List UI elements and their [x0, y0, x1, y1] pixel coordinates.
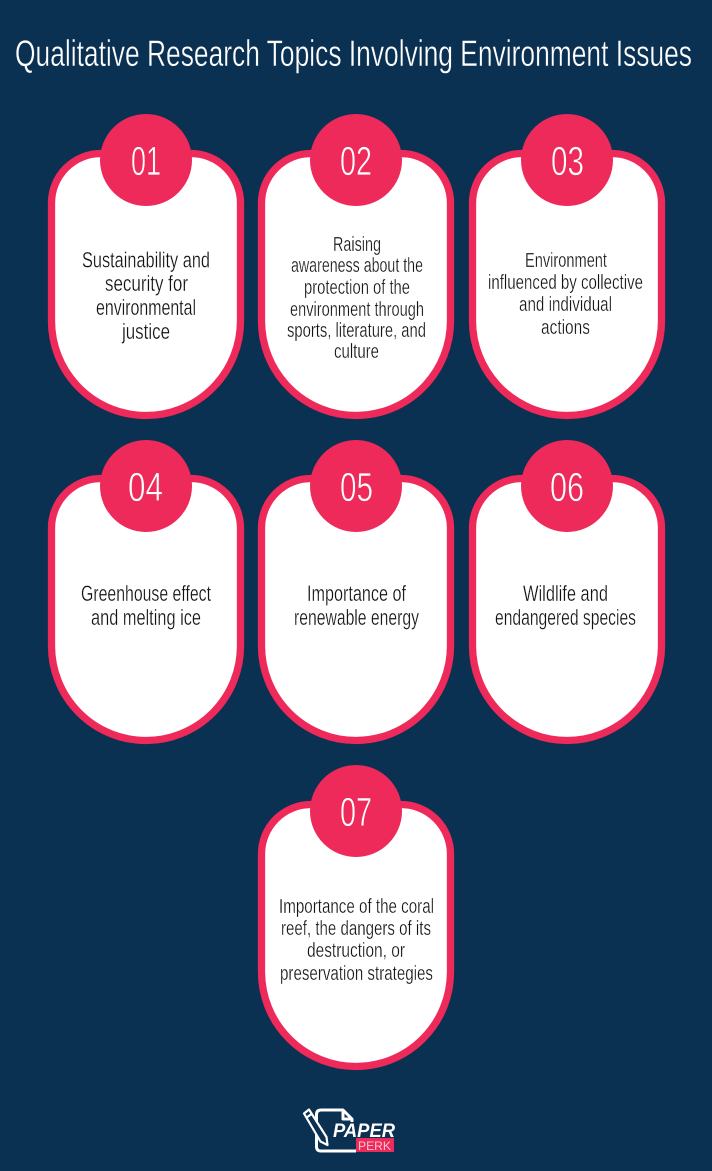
card 04 text: Greenhouse effect: [81, 581, 211, 606]
card 01 text: [82, 248, 210, 344]
number badge 06: 06: [550, 464, 584, 510]
card 06 text: Wildlife and: [523, 581, 608, 606]
number badge 07: 07: [340, 789, 372, 835]
number badge 05: 05: [340, 464, 373, 510]
card 04: [52, 440, 240, 740]
card 05 text: Importance of: [307, 581, 407, 606]
card 03 text: and individual: [519, 293, 612, 316]
number badge 03: 03: [551, 138, 584, 184]
number badge 05: [310, 440, 402, 532]
card 02 text: culture: [334, 340, 379, 363]
card 03 text: [488, 249, 643, 339]
card 06 text: endangered species: [495, 605, 636, 630]
logo word: PERK: PERK: [358, 1139, 391, 1153]
number badge 04: 04: [128, 464, 163, 510]
card 07 text: Importance of the coral: [279, 895, 434, 918]
number badge 01: 01: [131, 138, 161, 184]
card 02 text: sports, literature, and: [287, 319, 426, 342]
card 07 text: reef, the dangers of its: [281, 917, 431, 940]
card 06 text: [495, 581, 636, 630]
card 02 text: awareness about the: [291, 254, 423, 277]
card 03 text: influenced by collective: [488, 271, 643, 294]
card 06: [472, 440, 662, 740]
logo word: PAPER: PAPER: [333, 1121, 395, 1142]
card 02: [262, 114, 450, 415]
card 02 text: [287, 233, 426, 363]
card 02 text: Raising: [333, 233, 381, 256]
number badge 01: [100, 114, 192, 206]
card 07 text: [279, 895, 434, 985]
card 04 text: and melting ice: [91, 605, 201, 630]
number badge 04: [100, 440, 192, 532]
number badge 02: [310, 114, 402, 206]
card 05: [262, 440, 450, 740]
icon: pencil: [304, 1110, 328, 1145]
number badge 06: [521, 440, 613, 532]
card 01 text: Sustainability and: [82, 248, 210, 272]
card 02 text: environment through: [290, 298, 424, 321]
card 05 text: [294, 581, 419, 630]
card 02 text: protection of the: [304, 276, 410, 299]
card 03 text: Environment: [525, 249, 607, 272]
logo: Paper Perk: [304, 1110, 395, 1153]
card 03: [472, 114, 662, 415]
number badge 07: [310, 765, 402, 857]
card 01 text: justice: [121, 319, 170, 344]
card 01 text: environmental: [96, 295, 196, 320]
card 07 text: destruction, or: [307, 939, 405, 962]
card 07 text: preservation strategies: [280, 962, 433, 985]
card 01: [52, 114, 240, 415]
card 01 text: security for: [105, 271, 188, 296]
number badge 03: [521, 114, 613, 206]
card 07: [262, 765, 450, 1066]
card 05 text: renewable energy: [294, 605, 419, 630]
number badge 02: 02: [340, 138, 372, 184]
card 04 text: [81, 581, 211, 630]
icon: document: [316, 1110, 356, 1151]
card 03 text: actions: [541, 316, 590, 339]
